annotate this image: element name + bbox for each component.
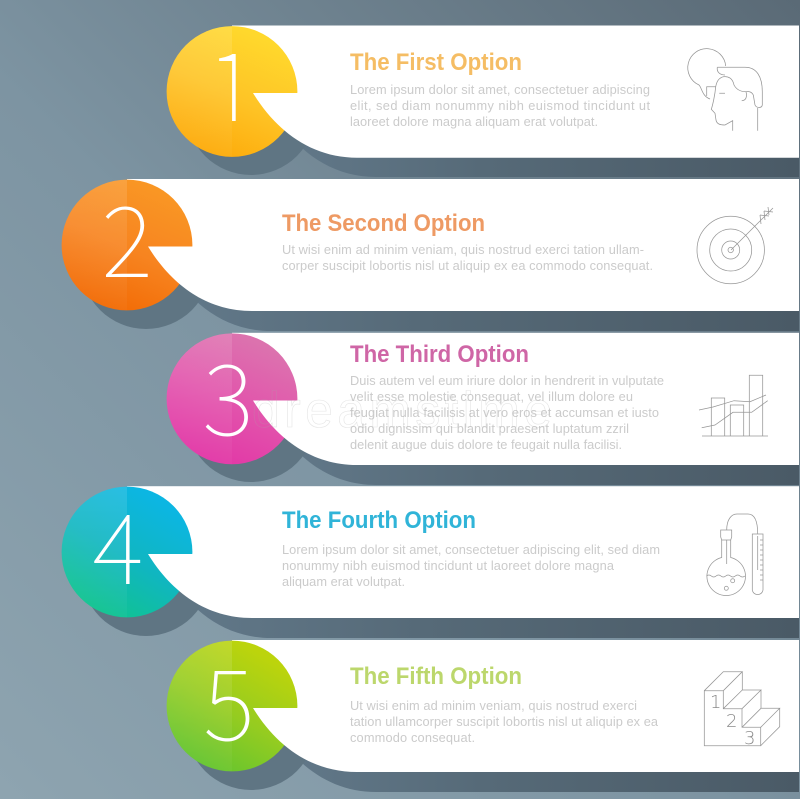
numeral: 2 bbox=[101, 164, 153, 306]
icon: bar chart with trend lines bbox=[699, 375, 768, 436]
number circle bbox=[167, 26, 297, 157]
number circle bbox=[167, 641, 297, 771]
numeral: 5 bbox=[203, 627, 255, 769]
heading: The Second Option bbox=[282, 210, 485, 237]
circle shadow bbox=[186, 352, 316, 482]
icon: target with arrow bbox=[697, 207, 773, 284]
numeral: 1 bbox=[205, 9, 259, 156]
heading: The Fifth Option bbox=[350, 663, 522, 690]
circle shadow bbox=[81, 199, 211, 329]
numeral: 4 bbox=[92, 471, 144, 613]
heading: The First Option bbox=[350, 49, 522, 76]
body text: velit esse molestie consequat, vel illum dolore eu bbox=[350, 389, 633, 404]
ribbon top bbox=[127, 179, 799, 249]
ribbon shadow bbox=[272, 418, 799, 485]
body text: Lorem ipsum dolor sit amet, consectetuer adipiscing elit, sed diam bbox=[282, 542, 660, 557]
body text bbox=[350, 82, 650, 129]
panel: first option bbox=[167, 9, 799, 177]
body text: commodo consequat. bbox=[350, 730, 475, 745]
heading: The Third Option bbox=[350, 341, 529, 368]
body text bbox=[350, 698, 659, 745]
heading: The Fourth Option bbox=[282, 507, 476, 534]
ribbon wedge bbox=[253, 708, 799, 772]
body text: Lorem ipsum dolor sit amet, consectetuer adipiscing bbox=[350, 82, 650, 97]
body text: Ut wisi enim ad minim veniam, quis nostrud exerci tation ullam- bbox=[282, 242, 644, 257]
body text bbox=[282, 542, 660, 589]
panel: second option bbox=[62, 164, 799, 331]
watermark: dreamstime bbox=[252, 382, 552, 438]
body text: elit, sed diam nonummy nibh euismod tincidunt ut bbox=[350, 98, 650, 113]
body text bbox=[350, 373, 664, 452]
body text: tation ullamcorper suscipit lobortis nisl ut aliquip ex ea bbox=[350, 714, 659, 729]
ribbon shadow bbox=[167, 572, 799, 638]
ribbon top bbox=[232, 640, 799, 710]
body text bbox=[282, 242, 653, 273]
body text: laoreet dolore magna aliquam erat volutpat. bbox=[350, 114, 598, 129]
circle shadow bbox=[186, 660, 316, 790]
body text: Duis autem vel eum iriure dolor in hendrerit in vulputate bbox=[350, 373, 664, 388]
ribbon wedge bbox=[253, 400, 799, 465]
body text: Ut wisi enim ad minim veniam, quis nostrud exerci bbox=[350, 698, 637, 713]
icon: head with speech bubble bbox=[688, 49, 762, 131]
ribbon wedge bbox=[253, 93, 799, 158]
icon: winners podium stairs: 3 bbox=[744, 728, 755, 749]
ribbon shadow bbox=[272, 726, 799, 792]
body text: delenit augue duis dolore te feugait nulla facilisi. bbox=[350, 437, 622, 452]
panel: fifth option bbox=[167, 627, 799, 792]
circle shadow bbox=[81, 506, 211, 636]
ribbon top bbox=[127, 486, 799, 556]
panel: fourth option bbox=[62, 471, 799, 638]
panel: third option bbox=[167, 322, 799, 485]
number circle bbox=[167, 333, 297, 464]
ribbon top bbox=[232, 333, 799, 403]
ribbon shadow bbox=[167, 264, 799, 331]
body text: aliquam erat volutpat. bbox=[282, 574, 405, 589]
body text: feugiat nulla facilisis at vero eros et accumsan et iusto bbox=[350, 405, 659, 420]
circle shadow bbox=[186, 45, 316, 175]
number circle bbox=[62, 180, 192, 310]
ribbon shadow bbox=[272, 111, 799, 177]
ribbon wedge bbox=[148, 246, 799, 311]
number circle bbox=[62, 487, 192, 617]
body text: nonummy nibh euismod tincidunt ut laoreet dolore magna bbox=[282, 558, 615, 573]
numeral: 3 bbox=[202, 322, 254, 464]
icon: winners podium stairs: 2 bbox=[726, 711, 737, 732]
icon: winners podium stairs bbox=[704, 672, 780, 749]
icon: winners podium stairs: 1 bbox=[710, 692, 721, 713]
ribbon wedge bbox=[148, 554, 799, 618]
body text: corper suscipit lobortis nisl ut aliquip ex ea commodo consequat. bbox=[282, 258, 653, 273]
body text: odio dignissim qui blandit praesent luptatum zzril bbox=[350, 421, 629, 436]
ribbon top bbox=[232, 26, 799, 96]
icon: flask and test tube bbox=[706, 514, 763, 596]
